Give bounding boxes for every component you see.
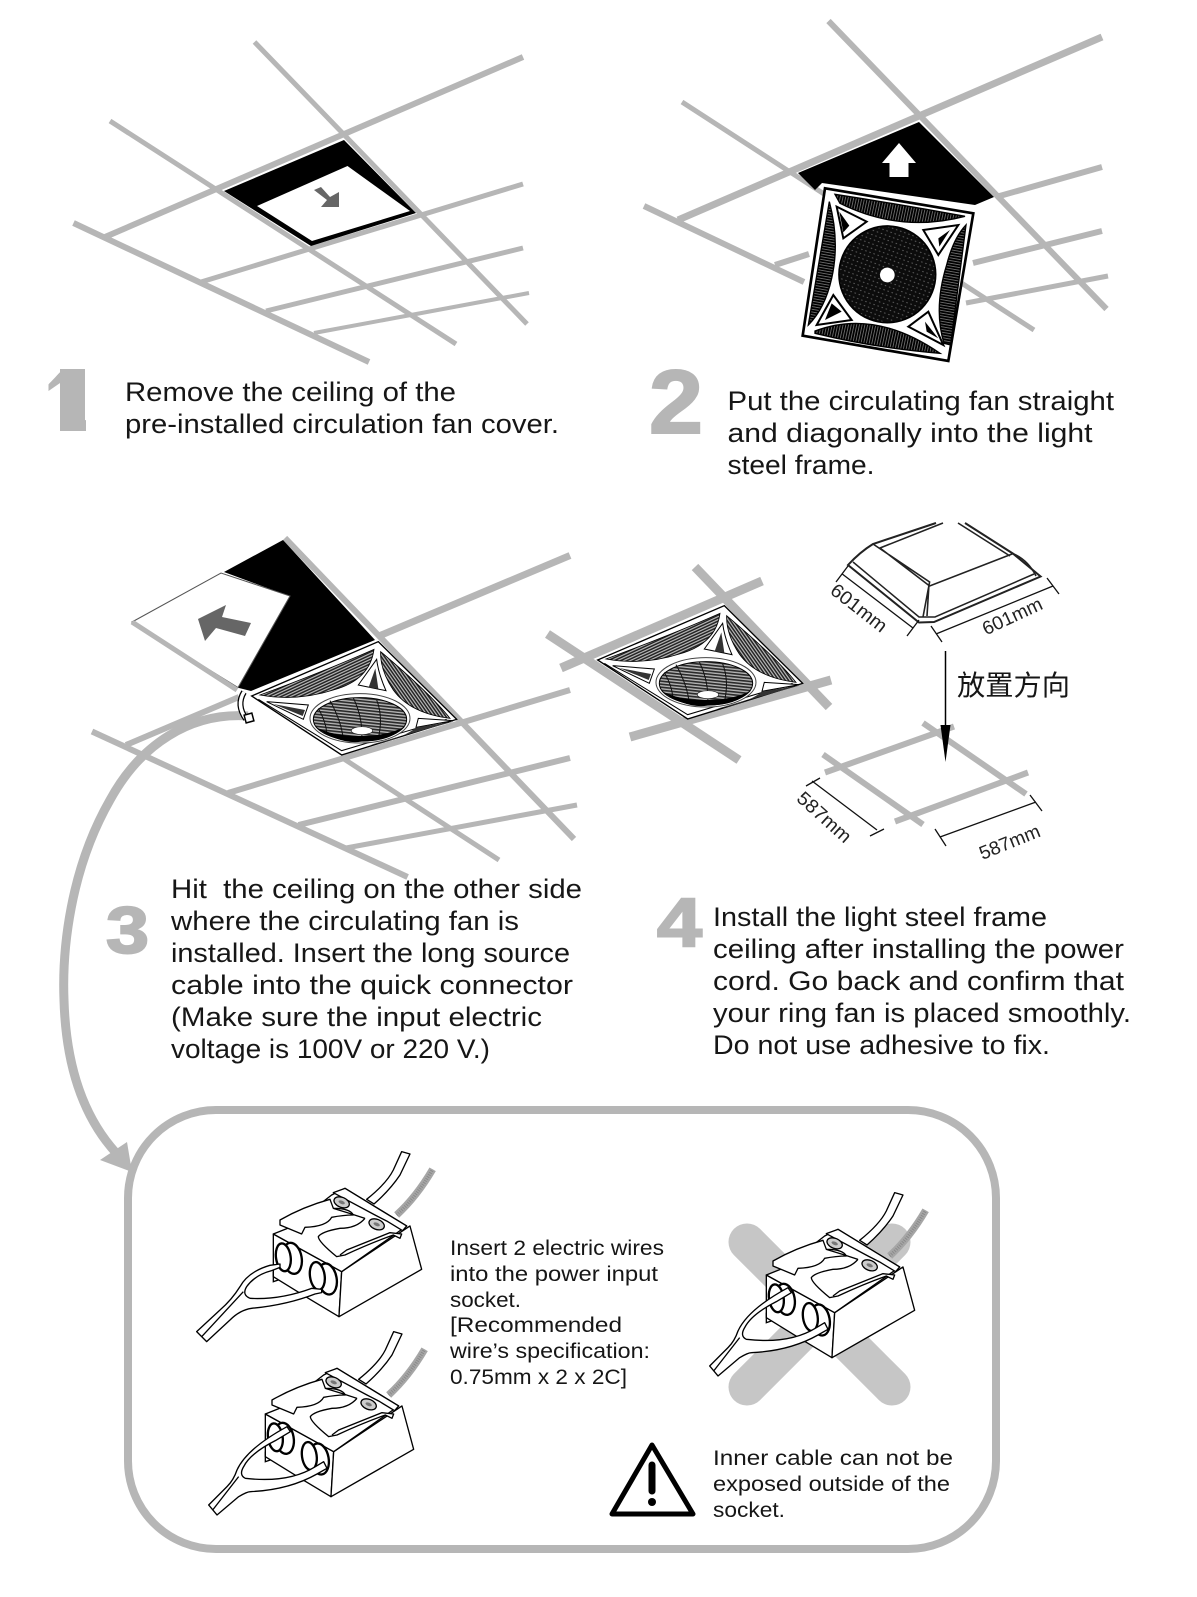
fan top view (803, 184, 977, 361)
panel: wiring detail (128, 1110, 996, 1549)
step 4 text: Do not use adhesive to fix. (713, 1030, 1050, 1060)
lower frame with 587mm dimensions: 587mm (976, 821, 1044, 865)
wrong connector with X mark (710, 1193, 926, 1387)
step 3 text: where the circulating fan is (170, 906, 519, 936)
ceiling grid 1 (74, 42, 529, 362)
step 3 text (170, 874, 582, 1064)
warning text (713, 1447, 953, 1522)
step 1 text: pre-installed circulation fan cover. (125, 409, 559, 439)
number 1: 1 (44, 352, 88, 449)
step 3 text: installed. Insert the long source (171, 938, 570, 968)
wiring instructions (449, 1237, 664, 1389)
step 1 text: Remove the ceiling of the (125, 377, 456, 407)
arrow head (100, 1142, 132, 1172)
panel box with 601mm dimensions: 601mm (826, 580, 891, 637)
step 1 text (125, 377, 559, 439)
wiring instructions: 0.75mm x 2 x 2C] (450, 1366, 627, 1389)
step 3 text: cable into the quick connector (171, 970, 573, 1000)
step 2 text: steel frame. (728, 450, 874, 480)
black opening (798, 122, 994, 205)
number 4: 4 (657, 884, 702, 961)
connector: correct bottom (209, 1332, 425, 1515)
step 4 text: cord. Go back and confirm that (713, 966, 1125, 996)
wiring instructions: wire’s specification: (449, 1340, 650, 1363)
white ceiling cover (257, 166, 410, 241)
step 3 text: Hit the ceiling on the other side (171, 874, 582, 904)
wiring instructions: [Recommended (450, 1314, 622, 1337)
step 4 text: Install the light steel frame (713, 902, 1047, 932)
panel: step 4 (548, 523, 1131, 1060)
step 2 text: Put the circulating fan straight (728, 386, 1115, 416)
number 2: 2 (649, 353, 703, 453)
connector: correct top (197, 1152, 433, 1342)
step 3 text: voltage is 100V or 220 V.) (171, 1034, 490, 1064)
warning text: Inner cable can not be (713, 1447, 953, 1470)
warning text: socket. (713, 1499, 785, 1522)
wiring instructions: into the power input (450, 1263, 658, 1286)
ceiling grid 3 (92, 538, 577, 877)
panel: step 2 (644, 21, 1115, 480)
warning triangle (612, 1445, 693, 1514)
placement direction label: 放置方向 (957, 670, 1070, 701)
placement direction arrow (940, 651, 950, 762)
panel box with 601mm dimensions: 601mm (979, 594, 1046, 640)
lower frame with 587mm dimensions: 587mm (792, 788, 855, 848)
arrow left (198, 605, 251, 641)
lower frame with 587mm dimensions (792, 723, 1044, 865)
number 1 (48, 369, 86, 431)
step 4 text: ceiling after installing the power (713, 934, 1124, 964)
step 3 text: (Make sure the input electric (171, 1002, 542, 1032)
panel: step 1 (44, 42, 559, 449)
step 2 text: and diagonally into the light (728, 418, 1093, 448)
warning text: exposed outside of the (713, 1473, 950, 1496)
step 2 text (728, 386, 1115, 480)
black opening 3 (224, 540, 375, 691)
rounded frame (128, 1110, 996, 1549)
fan with crossed bars (548, 567, 831, 760)
step 4 text: your ring fan is placed smoothly. (713, 998, 1131, 1028)
wiring instructions: socket. (450, 1289, 521, 1312)
black ceiling opening (224, 140, 416, 246)
wiring instructions: Insert 2 electric wires (450, 1237, 664, 1260)
number 3: 3 (106, 893, 149, 967)
ceiling grid 2 (644, 21, 1108, 330)
power cable arc (64, 716, 248, 1155)
cable stub (240, 692, 254, 723)
white up arrow (882, 143, 916, 177)
arrow down (314, 187, 339, 207)
panel: step 3 (64, 538, 582, 1172)
sliding ceiling cover (132, 573, 290, 688)
step 4 text (713, 902, 1131, 1060)
panel box with 601mm dimensions (826, 523, 1059, 642)
fan in ceiling (252, 642, 457, 755)
